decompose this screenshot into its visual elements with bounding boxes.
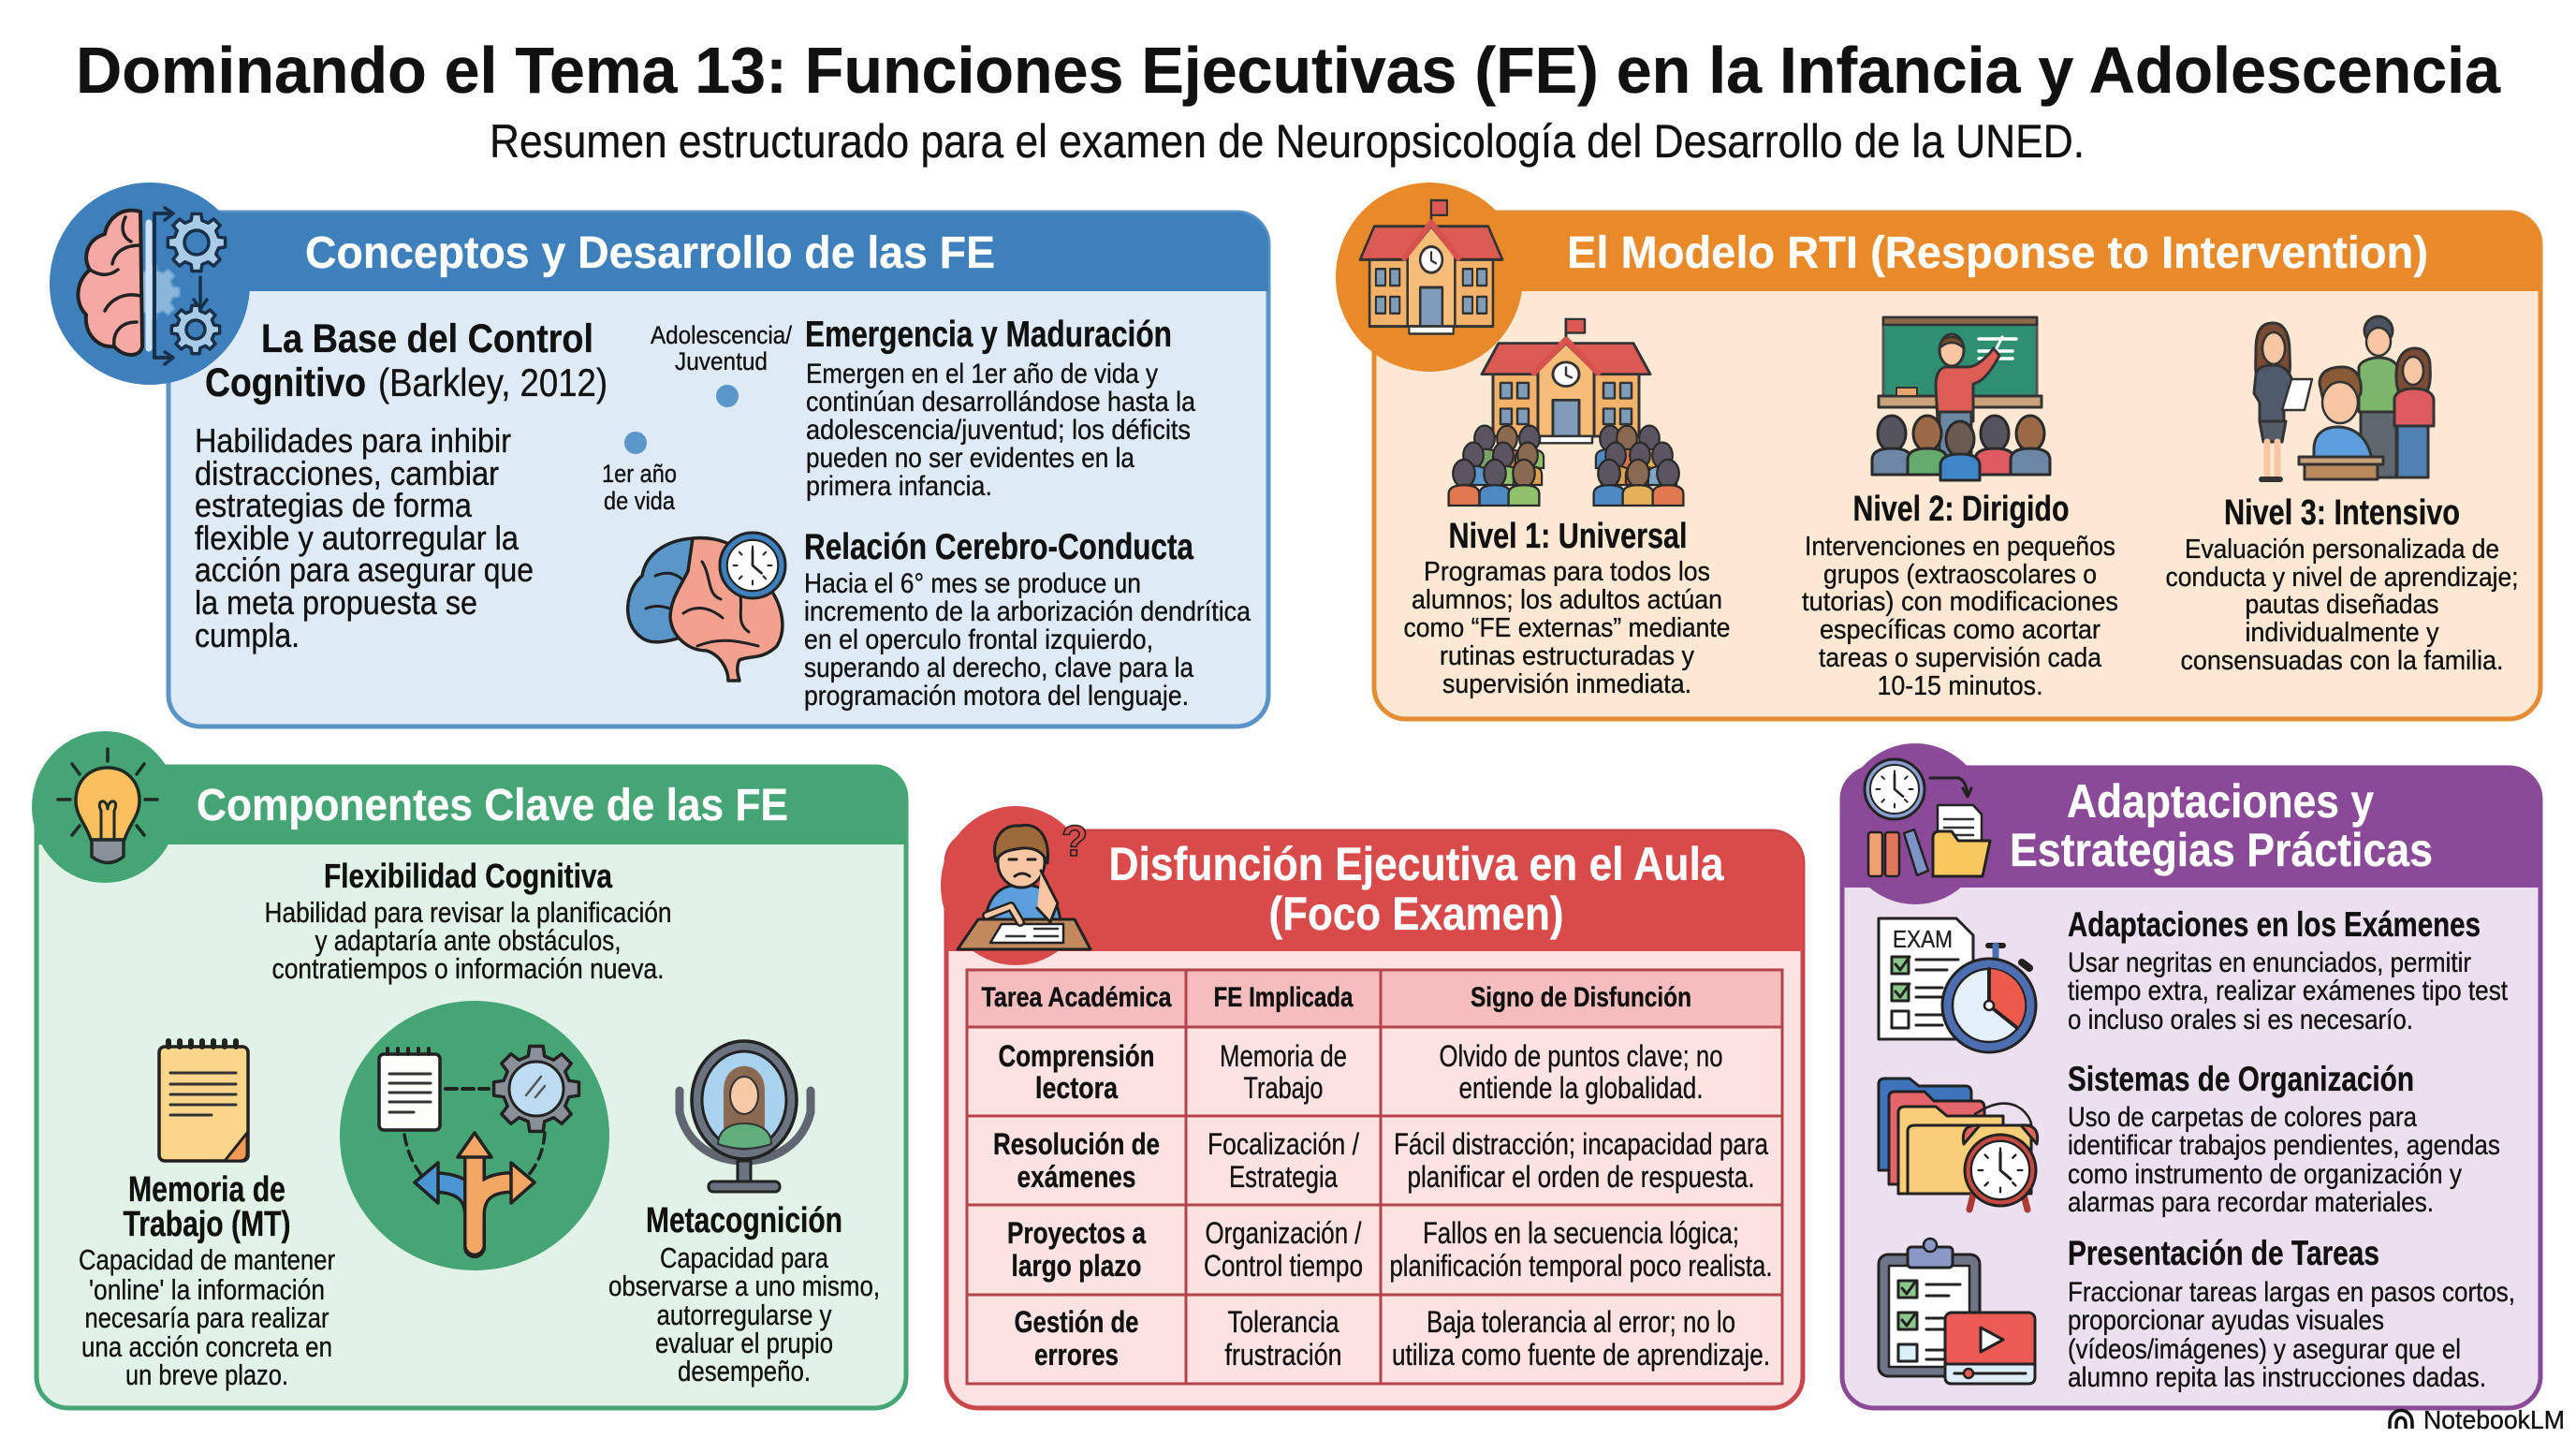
text: nivel 3: pautas diseñadas bbox=[2245, 590, 2439, 620]
text: adaptaciones en los exámenes: o incluso orales si es necesarío. bbox=[2068, 1005, 2413, 1035]
text: emergencia y maduración: Emergencia y Maduración bbox=[805, 315, 1172, 355]
heading: la base del control cognitivo: Cognitivo bbox=[205, 360, 366, 405]
table row: proyectos a largo plazo: planificación temporal poco realista. bbox=[1389, 1249, 1773, 1283]
text: adaptaciones en los exámenes: Adaptaciones en los Exámenes bbox=[2068, 905, 2481, 944]
text: nivel 2: grupos (extraoscolares o bbox=[1823, 560, 2097, 590]
timeline bbox=[602, 321, 792, 515]
text: relación cerebro-conducta: Hacia el 6° mes se produce un bbox=[804, 568, 1141, 599]
text: nivel 3: Evaluación personalizada de bbox=[2185, 535, 2499, 565]
icon: evaluator, parents and child bbox=[2254, 316, 2434, 479]
text: relación cerebro-conducta: programación motora del lenguaje. bbox=[804, 681, 1189, 712]
table row: comprensión lectora: Comprensión bbox=[998, 1039, 1155, 1073]
text: metacognición: Metacognición bbox=[646, 1201, 842, 1240]
text: nivel 2: 10-15 minutos. bbox=[1878, 671, 2042, 701]
text: sistemas de organización bbox=[2068, 1060, 2500, 1218]
text: habilidades: estrategias de forma bbox=[195, 486, 473, 524]
text: habilidades: Habilidades para inhibir bbox=[195, 421, 511, 460]
icon: confused student bbox=[941, 806, 1090, 965]
text: nivel 1: Nivel 1: Universal bbox=[1449, 517, 1687, 556]
table row: gestión de errores: Gestión de bbox=[1015, 1305, 1138, 1339]
table row: proyectos a largo plazo: Proyectos a bbox=[1007, 1216, 1146, 1250]
text: relación cerebro-conducta: Relación Cerebro-Conducta bbox=[804, 527, 1193, 567]
icon: exam and stopwatch: EXAM bbox=[1893, 925, 1953, 953]
table header row: FE Implicada bbox=[1213, 982, 1354, 1013]
icon: light bulb bbox=[32, 731, 178, 883]
text: relación cerebro-conducta: incremento de la arborización dendrítica bbox=[804, 596, 1251, 627]
text: nivel 3: conducta y nivel de aprendizaje; bbox=[2166, 563, 2518, 593]
text: memoria de trabajo bbox=[79, 1170, 335, 1391]
table header row: Signo de Disfunción bbox=[1471, 982, 1691, 1013]
icon: brain with gears bbox=[50, 183, 250, 385]
table row: resolución de exámenes: Fácil distracción; incapacidad para bbox=[1394, 1127, 1768, 1161]
table row: proyectos a largo plazo bbox=[1007, 1216, 1773, 1283]
icon: notepad bbox=[159, 1041, 248, 1161]
icon: clock, binders and folder bbox=[1840, 743, 1990, 904]
table row: resolución de exámenes bbox=[993, 1127, 1768, 1194]
text: emergencia y maduración: primera infancia. bbox=[806, 471, 992, 502]
text: nivel 2: específicas como acortar bbox=[1820, 615, 2100, 645]
text: nivel 3: individualmente y bbox=[2245, 618, 2439, 648]
icon: central green circle with memory, gear and arrows bbox=[340, 1001, 609, 1270]
timeline: de vida bbox=[604, 487, 676, 515]
NotebookLM logo: NotebookLM bbox=[2423, 1405, 2565, 1434]
icon: school with crowd bbox=[1449, 319, 1683, 506]
heading: disfunción: Disfunción Ejecutiva en el Aula bbox=[1108, 838, 1725, 890]
icon: teacher with small group bbox=[1872, 317, 2050, 480]
text: adaptaciones en los exámenes: tiempo extra, realizar exámenes tipo test bbox=[2068, 976, 2509, 1006]
text: nivel 2: Intervenciones en pequeños bbox=[1805, 532, 2115, 562]
timeline: 1er año bbox=[602, 460, 677, 488]
icon: exam and stopwatch bbox=[1879, 918, 2036, 1052]
text: habilidades: cumpla. bbox=[195, 616, 300, 654]
heading: adaptaciones: Adaptaciones y bbox=[2067, 775, 2374, 828]
timeline: Juventud bbox=[675, 347, 768, 375]
text: memoria de trabajo: Trabajo (MT) bbox=[124, 1205, 290, 1244]
table header row: Tarea Académica bbox=[981, 982, 1172, 1013]
text: nivel 2: tutorias) con modificaciones bbox=[1802, 587, 2118, 617]
heading: RTI: El Modelo RTI (Response to Intervention) bbox=[1567, 228, 2428, 278]
text: nivel 2: tareas o supervisión cada bbox=[1819, 643, 2102, 673]
table row: resolución de exámenes: Estrategia bbox=[1229, 1160, 1338, 1194]
panel: componentes clave bbox=[32, 731, 906, 1408]
text: question mark: ? bbox=[1061, 816, 1088, 865]
heading: adaptaciones: Estrategias Prácticas bbox=[2010, 824, 2433, 876]
icon: folders and alarm clock bbox=[1879, 1078, 2038, 1210]
text: nivel 1: Programas para todos los bbox=[1424, 557, 1710, 587]
text: adaptaciones en los exámenes: Usar negritas en enunciados, permitir bbox=[2068, 947, 2471, 978]
table row: comprensión lectora: entiende la globalidad. bbox=[1458, 1071, 1704, 1105]
table row: gestión de errores: utiliza como fuente de aprendizaje. bbox=[1392, 1338, 1770, 1372]
heading: disfunción: (Foco Examen) bbox=[1269, 888, 1563, 940]
text: flexibilidad cognitiva bbox=[264, 857, 672, 985]
text: nivel 1 bbox=[1404, 517, 1730, 699]
text: habilidades: distracciones, cambiar bbox=[195, 454, 499, 492]
table row: gestión de errores: errores bbox=[1034, 1338, 1119, 1372]
text: nivel 1: alumnos; los adultos actúan bbox=[1412, 585, 1722, 615]
text: habilidades: acción para asegurar que bbox=[195, 550, 534, 589]
text: emergencia y maduración: pueden no ser evidentes en la bbox=[806, 443, 1134, 474]
table row: comprensión lectora: Trabajo bbox=[1243, 1071, 1324, 1105]
text: sistemas de organización: Uso de carpetas de colores para bbox=[2068, 1102, 2417, 1133]
text: nivel 2: Nivel 2: Dirigido bbox=[1853, 490, 2069, 529]
table row: gestión de errores: Baja tolerancia al error; no lo bbox=[1427, 1305, 1735, 1339]
panel: modelo RTI bbox=[1336, 183, 2540, 719]
text: nivel 1: supervisión inmediata. bbox=[1442, 669, 1691, 699]
text: metacognición: autorregularse y bbox=[657, 1299, 832, 1331]
text: flexibilidad cognitiva: Habilidad para revisar la planificación bbox=[264, 896, 672, 929]
heading: adaptaciones bbox=[2010, 775, 2433, 876]
table row: resolución de exámenes: exámenes bbox=[1017, 1160, 1136, 1194]
icon: brain with clock bbox=[628, 533, 785, 681]
heading: la base del control cognitivo: La Base del Control bbox=[261, 316, 593, 361]
icon: mirror bbox=[680, 1041, 811, 1192]
text: flexibilidad cognitiva: y adaptaría ante obstáculos, bbox=[315, 924, 622, 957]
text: sistemas de organización: alarmas para recordar materiales. bbox=[2068, 1187, 2434, 1218]
text: emergencia y maduración: adolescencia/juventud; los déficits bbox=[806, 415, 1191, 446]
text: nivel 1: rutinas estructuradas y bbox=[1440, 641, 1694, 671]
heading: la base del control cognitivo bbox=[205, 316, 607, 405]
text: memoria de trabajo: Capacidad de mantener bbox=[79, 1243, 335, 1276]
icon: clipboard and video bbox=[1879, 1239, 2035, 1384]
title: Dominando el Tema 13: Funciones Ejecutivas (FE) en la Infancia y Adolescencia bbox=[76, 34, 2501, 107]
text: metacognición: evaluar el prupio bbox=[655, 1327, 833, 1359]
text: nivel 1: como “FE externas” mediante bbox=[1404, 613, 1730, 643]
text: memoria de trabajo: Memoria de bbox=[128, 1170, 285, 1210]
text: presentación de tareas: proporcionar ayudas visuales bbox=[2068, 1305, 2384, 1336]
table header row bbox=[981, 982, 1691, 1013]
table row: comprensión lectora bbox=[998, 1039, 1722, 1105]
text: nivel 2 bbox=[1802, 490, 2118, 701]
text: adaptaciones en los exámenes bbox=[2068, 905, 2509, 1035]
text: habilidades bbox=[195, 421, 534, 654]
table row: resolución de exámenes: Resolución de bbox=[993, 1127, 1160, 1161]
text: flexibilidad cognitiva: contratiempos o información nueva. bbox=[271, 952, 665, 985]
text: presentación de tareas: alumno repita las instrucciones dadas. bbox=[2068, 1362, 2486, 1393]
text: habilidades: la meta propuesta se bbox=[195, 583, 477, 622]
text: presentación de tareas: (vídeos/imágenes) y asegurar que el bbox=[2068, 1334, 2461, 1365]
heading: disfunción bbox=[1108, 838, 1725, 940]
text: nivel 3 bbox=[2166, 493, 2518, 676]
icon: school badge bbox=[1336, 183, 1523, 372]
table row: comprensión lectora: lectora bbox=[1035, 1071, 1118, 1105]
table row: proyectos a largo plazo: Organización / bbox=[1206, 1216, 1362, 1250]
text: metacognición: observarse a uno mismo, bbox=[608, 1269, 880, 1302]
panel: conceptos y desarrollo bbox=[50, 183, 1268, 726]
text: nivel 3: consensuadas con la familia. bbox=[2181, 646, 2503, 676]
table row: comprensión lectora: Olvido de puntos clave; no bbox=[1440, 1039, 1722, 1073]
text: relación cerebro-conducta: superando al derecho, clave para la bbox=[804, 653, 1193, 683]
text: sistemas de organización: identificar trabajos pendientes, agendas bbox=[2068, 1130, 2500, 1161]
subtitle: Resumen estructurado para el examen de Neuropsicología del Desarrollo de la UNED. bbox=[490, 115, 2085, 168]
text: relación cerebro-conducta: en el operculo frontal izquierdo, bbox=[804, 624, 1153, 655]
text: sistemas de organización: como instrumento de organización y bbox=[2068, 1159, 2462, 1190]
table row: gestión de errores: Tolerancia bbox=[1228, 1305, 1339, 1339]
table row: proyectos a largo plazo: largo plazo bbox=[1011, 1249, 1142, 1283]
text: metacognición bbox=[608, 1201, 880, 1387]
heading: conceptos: Conceptos y Desarrollo de las FE bbox=[305, 228, 995, 278]
text: memoria de trabajo: una acción concreta en bbox=[81, 1330, 332, 1363]
text: metacognición: desempeño. bbox=[678, 1355, 811, 1387]
text: relación cerebro-conducta bbox=[804, 527, 1251, 712]
text: nivel 3: Nivel 3: Intensivo bbox=[2224, 493, 2460, 533]
text: emergencia y maduración bbox=[805, 315, 1195, 502]
heading: componentes: Componentes Clave de las FE bbox=[197, 781, 788, 830]
table row: proyectos a largo plazo: Control tiempo bbox=[1204, 1249, 1363, 1283]
panel: disfunción ejecutiva bbox=[941, 806, 1803, 1408]
table row: resolución de exámenes: Focalización / bbox=[1208, 1127, 1359, 1161]
table: tareas, FE, signos bbox=[967, 970, 1782, 1384]
text: habilidades: flexible y autorregular la bbox=[195, 519, 520, 557]
text: emergencia y maduración: continúan desarrollándose hasta la bbox=[806, 387, 1195, 418]
text: memoria de trabajo: un breve plazo. bbox=[125, 1358, 288, 1391]
table row: resolución de exámenes: planificar el orden de respuesta. bbox=[1408, 1160, 1754, 1194]
table row: gestión de errores bbox=[1015, 1305, 1770, 1372]
text: memoria de trabajo: necesaría para realizar bbox=[84, 1301, 329, 1334]
timeline: Adolescencia/ bbox=[651, 321, 792, 349]
text: presentación de tareas bbox=[2068, 1234, 2515, 1393]
table row: gestión de errores: frustración bbox=[1224, 1338, 1342, 1372]
text: memoria de trabajo: 'online' la información bbox=[89, 1273, 325, 1306]
table row: comprensión lectora: Memoria de bbox=[1220, 1039, 1347, 1073]
text: flexibilidad cognitiva: Flexibilidad Cognitiva bbox=[324, 857, 613, 895]
text: sistemas de organización: Sistemas de Organización bbox=[2068, 1060, 2414, 1098]
table row: proyectos a largo plazo: Fallos en la secuencia lógica; bbox=[1423, 1216, 1739, 1250]
text: metacognición: Capacidad para bbox=[660, 1241, 829, 1274]
heading: la base del control cognitivo: (Barkley, 2012) bbox=[378, 360, 607, 404]
panel: adaptaciones y estrategias bbox=[1840, 743, 2540, 1408]
text: emergencia y maduración: Emergen en el 1er año de vida y bbox=[806, 359, 1158, 389]
text: presentación de tareas: Presentación de Tareas bbox=[2068, 1234, 2379, 1272]
text: presentación de tareas: Fraccionar tareas largas en pasos cortos, bbox=[2068, 1277, 2515, 1308]
